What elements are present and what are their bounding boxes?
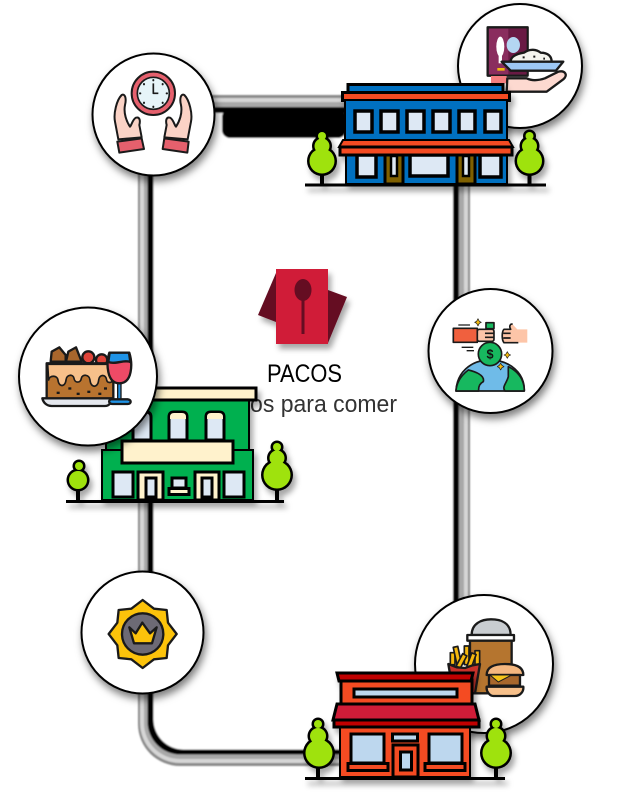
circle: menu and dish — [458, 4, 582, 128]
circle: fast food — [415, 595, 553, 733]
title: PACOS: PACOS — [267, 360, 342, 388]
circle: clock in hands — [92, 54, 214, 176]
phone frame — [138, 95, 470, 766]
logo: PACOS — [258, 269, 347, 344]
ground line and trees — [303, 718, 512, 780]
building body — [333, 673, 479, 777]
building: blue restaurant — [305, 84, 546, 186]
circle: money and globe — [428, 289, 552, 413]
ground line and trees — [305, 130, 546, 186]
building: green restaurant — [66, 388, 293, 503]
circle: dessert and wine — [19, 308, 157, 446]
building body — [339, 84, 513, 184]
circle: quality badge — [82, 572, 204, 694]
building: red restaurant — [303, 673, 512, 780]
ground line and trees — [66, 440, 293, 503]
building body — [102, 388, 256, 500]
subtitle: Tiempos para comer — [187, 391, 397, 418]
circle: money and globe: $ — [486, 347, 493, 361]
